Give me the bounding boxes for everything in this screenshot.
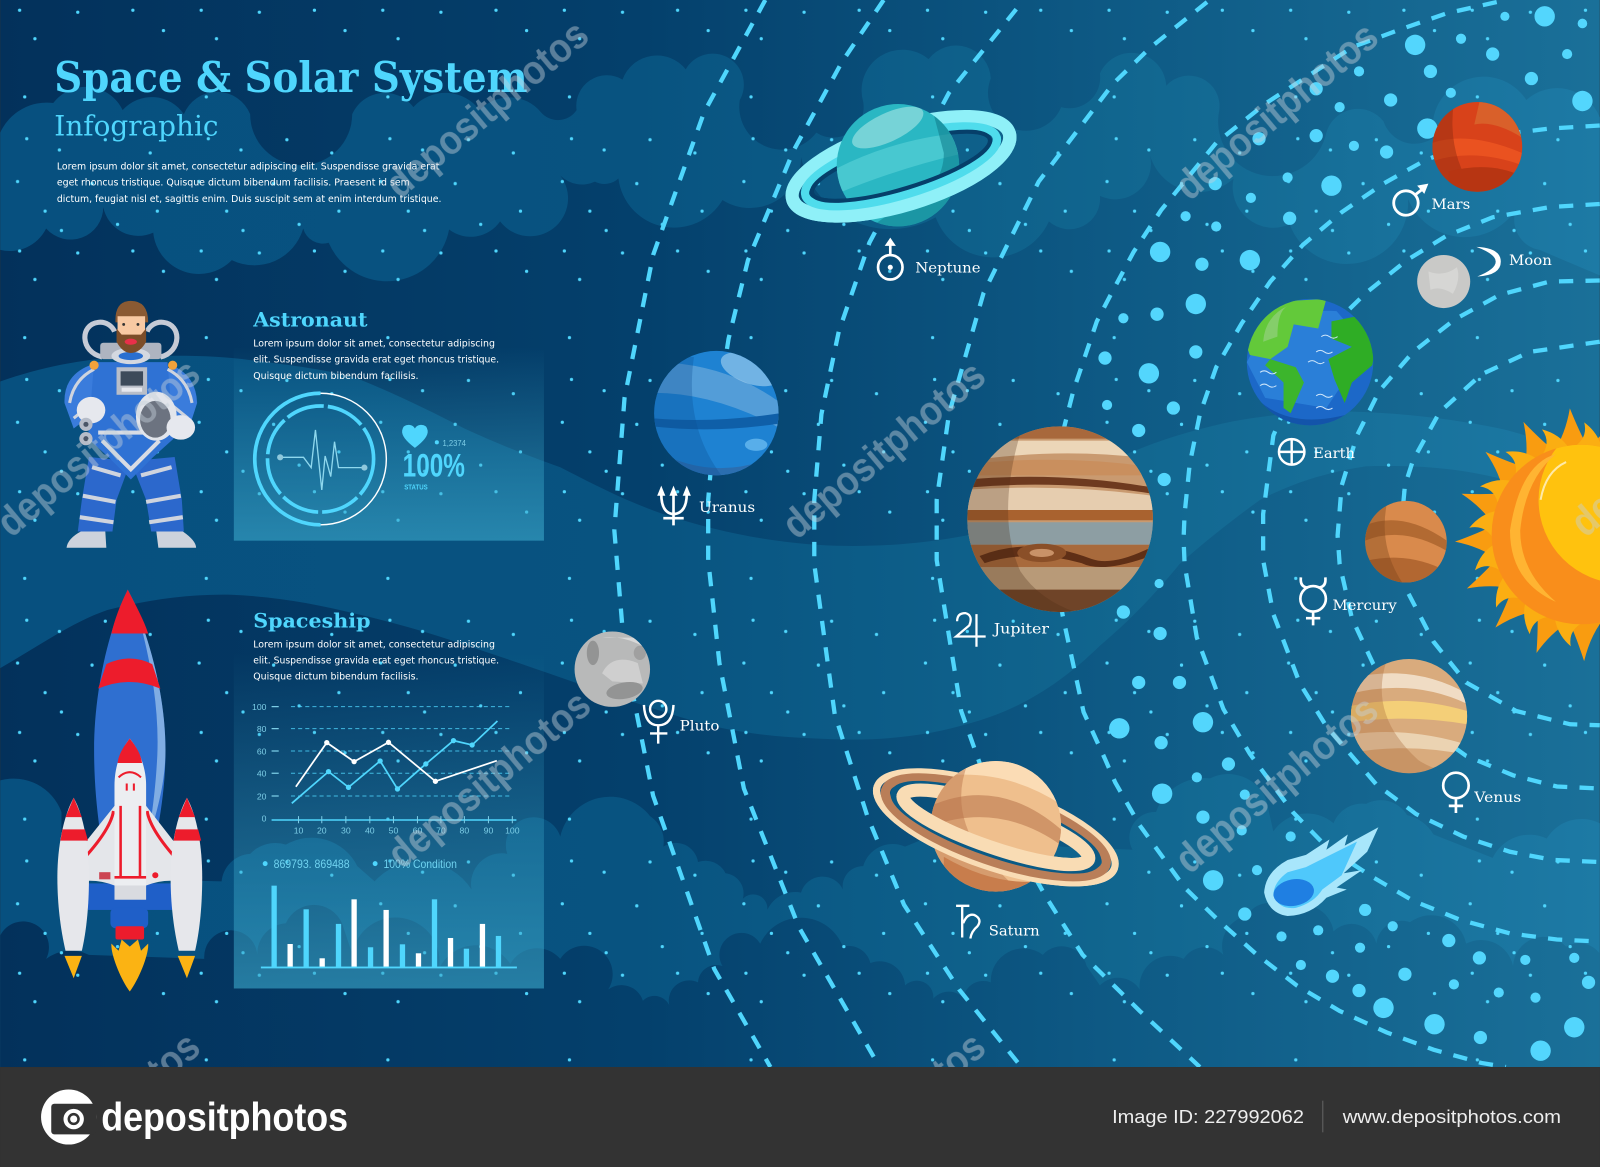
line chart: 50 (389, 825, 398, 835)
icon: Venus symbol (1443, 773, 1469, 813)
gloves (77, 397, 105, 423)
line chart (252, 702, 520, 835)
sun (1454, 407, 1600, 662)
line chart: 30 (341, 825, 351, 835)
Earth symbol and label (1279, 439, 1355, 465)
planet: Mars (1432, 102, 1522, 194)
icon: Saturn symbol (956, 906, 979, 938)
chart legend: 869793. 869488 (274, 858, 350, 871)
status readout (402, 425, 466, 492)
bottom cloud band (0, 774, 1600, 1067)
icon: Mars symbol (1394, 184, 1428, 215)
main body (94, 590, 165, 898)
rocket (57, 590, 202, 992)
status readout: 1,2374 (442, 439, 466, 448)
Neptune symbol and label: Neptune (915, 260, 981, 276)
moon (1417, 255, 1470, 308)
Saturn symbol and label: Saturn (989, 923, 1040, 939)
icon: Neptune symbol (878, 238, 903, 280)
line chart: 20 (257, 791, 267, 801)
line chart: 60 (413, 825, 422, 835)
wings (74, 806, 186, 885)
spaceship text: elit. Suspendisse gravida erat eget rhoncus tristique. (253, 656, 499, 667)
website: www.depositphotos.com (1342, 1106, 1561, 1127)
icon: Mercury symbol (1300, 577, 1326, 625)
line chart: 80 (257, 724, 267, 734)
line chart: 100 (505, 825, 520, 835)
watermarks: depositphotos (773, 352, 994, 547)
Jupiter symbol and label: Jupiter (992, 621, 1049, 637)
panel: astronaut backdrop (234, 347, 544, 541)
astronaut text: elit. Suspendisse gravida erat eget rhoncus tristique. (253, 355, 499, 366)
logo icon (41, 1089, 96, 1145)
spaceship text: Quisque dictum bibendum facilisis. (253, 671, 418, 682)
Saturn symbol and label (956, 906, 1040, 939)
icon: Jupiter symbol (956, 613, 986, 647)
icon: crescent (1476, 247, 1501, 276)
line chart: 20 (317, 825, 327, 835)
title: Space & Solar System (54, 53, 528, 102)
bottom dark clouds (0, 903, 1600, 1067)
asteroid belt (1098, 6, 1595, 1061)
logo text: depositphotos (101, 1095, 348, 1139)
right booster (171, 798, 202, 951)
left booster (57, 798, 89, 951)
icon: Earth symbol (1279, 439, 1304, 465)
Uranus symbol and label (657, 486, 755, 525)
orbits (614, 0, 1600, 1067)
top cloud band (0, 46, 1600, 281)
heading: astronaut: Astronaut (252, 307, 368, 331)
legs (78, 457, 131, 531)
Earth symbol and label: Earth (1313, 446, 1355, 462)
head (115, 301, 148, 322)
astronaut text (253, 338, 499, 382)
subtitle: Infographic (54, 111, 219, 143)
Pluto symbol and label: Pluto (680, 718, 719, 734)
intro text: Lorem ipsum dolor sit amet, consectetur adipiscing elit. Suspendisse gravida erat (57, 161, 440, 172)
watermarks: depositphotos (1166, 686, 1387, 882)
intro text: eget rhoncus tristique. Quisque dictum bibendum facilisis. Praesent id sem (57, 178, 410, 189)
panel: spaceship backdrop (234, 653, 544, 988)
icon: heart (402, 425, 428, 448)
Uranus symbol and label: Uranus (699, 500, 755, 516)
planet: Saturn (872, 761, 1119, 892)
line chart: 60 (257, 746, 267, 756)
shuttle body (114, 739, 146, 885)
line chart: 100 (252, 702, 267, 712)
astronaut figure (64, 301, 197, 548)
line chart: 40 (257, 768, 267, 778)
image id: Image ID: 227992062 (1112, 1106, 1304, 1127)
planet: Neptune (785, 104, 1016, 226)
status readout: STATUS (404, 483, 428, 492)
astronaut text: Quisque dictum bibendum facilisis. (253, 371, 418, 382)
planet: Earth (1247, 299, 1375, 428)
Mars symbol and label: Mars (1431, 197, 1470, 213)
torso (88, 362, 174, 479)
line chart: 80 (460, 825, 469, 835)
astronaut text: Lorem ipsum dolor sit amet, consectetur adipiscing (253, 338, 495, 349)
wave band (0, 356, 1600, 740)
status dial (255, 393, 386, 525)
intro text (57, 161, 441, 205)
planet: Venus (1351, 658, 1467, 773)
planet: Pluto (575, 631, 653, 707)
Pluto symbol and label (644, 701, 719, 744)
line chart: 10 (294, 825, 304, 835)
Neptune symbol and label (878, 238, 981, 280)
chart legend (263, 858, 457, 871)
planet: Mercury (1365, 500, 1447, 587)
line chart: 40 (365, 825, 375, 835)
Moon symbol and label: Moon (1509, 253, 1552, 269)
helmet (136, 392, 177, 441)
planet: Uranus (654, 350, 779, 476)
Venus symbol and label: Venus (1473, 790, 1521, 806)
watermarks: depositphotos (378, 681, 599, 877)
comet (1264, 827, 1378, 916)
footer bar (0, 1067, 1600, 1167)
bar chart (261, 886, 517, 968)
line chart: 70 (436, 825, 446, 835)
icon: Uranus symbol (657, 486, 691, 525)
Venus symbol and label (1443, 773, 1521, 813)
chart legend: 100% Condition (383, 858, 457, 871)
boots (67, 531, 196, 548)
spaceship text: Lorem ipsum dolor sit amet, consectetur adipiscing (253, 639, 495, 650)
intro text: dictum, feugiat nisl et, sagittis enim. Duis suscipit sem at enim interdum tristique. (57, 194, 441, 205)
Mercury symbol and label (1300, 577, 1398, 625)
planet: Jupiter (967, 426, 1153, 614)
arms (64, 365, 102, 428)
Jupiter symbol and label (956, 613, 1049, 647)
lower blue section (88, 883, 174, 910)
collar (111, 348, 150, 364)
spaceship text (253, 639, 499, 682)
icon: Pluto symbol (644, 701, 674, 744)
line chart: 90 (484, 825, 493, 835)
line chart: 0 (262, 814, 267, 824)
heading: spaceship: Spaceship (253, 608, 371, 632)
status readout: 100% (403, 446, 465, 483)
Mars symbol and label (1394, 184, 1470, 215)
Mercury symbol and label: Mercury (1332, 598, 1398, 614)
Moon symbol and label (1476, 247, 1552, 276)
main flame (111, 940, 148, 992)
